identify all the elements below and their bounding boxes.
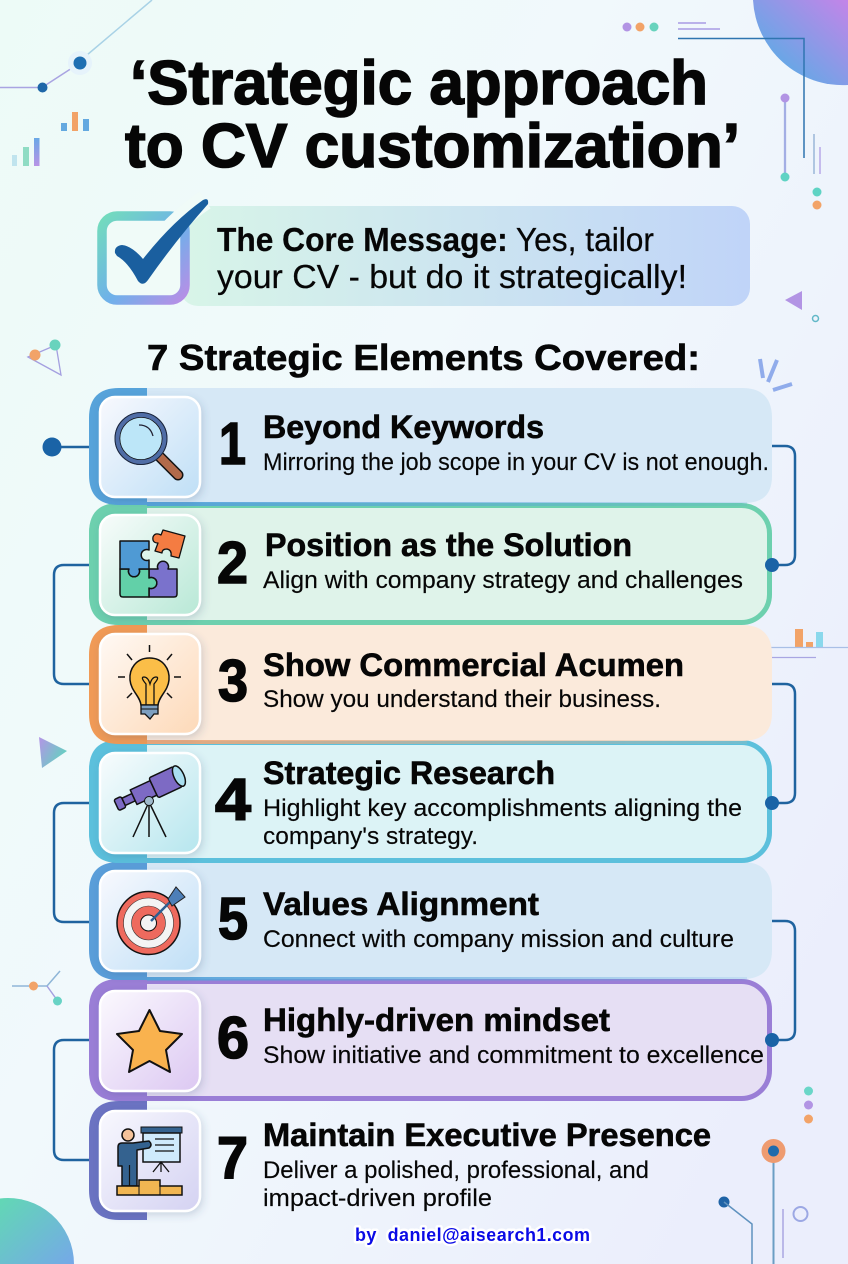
connector dot bbox=[765, 1033, 779, 1047]
row 1 text: Mirroring the job scope in your CV is not enough. bbox=[263, 449, 769, 476]
connector dot bbox=[765, 558, 779, 572]
row 3 text: Show you understand their business. bbox=[263, 686, 661, 713]
panel: row 2 bbox=[89, 503, 779, 625]
row 1 text: Beyond Keywords bbox=[263, 409, 544, 445]
number 5: 5 bbox=[218, 886, 248, 952]
connectors bbox=[52, 446, 795, 1160]
decoration: triangle at left bbox=[39, 737, 67, 768]
row 4 text: Highlight key accomplishments aligning the bbox=[263, 795, 742, 822]
title: to CV customization’ bbox=[125, 112, 740, 181]
core message text: The Core Message: Yes, tailor bbox=[217, 221, 654, 258]
decoration: small bar charts bbox=[12, 112, 89, 166]
row 2 text: Align with company strategy and challenges bbox=[263, 567, 743, 594]
icon tile: puzzle bbox=[100, 515, 200, 615]
row 4 text bbox=[263, 755, 742, 850]
core message text: your CV - but do it strategically! bbox=[217, 258, 687, 295]
row 5 text: Connect with company mission and culture bbox=[263, 926, 734, 953]
row 6 text bbox=[263, 1002, 764, 1069]
panel: row 7 bbox=[89, 1101, 711, 1220]
row 5 text: Values Alignment bbox=[263, 886, 539, 922]
title bbox=[125, 49, 740, 181]
panel: row 6 bbox=[89, 979, 779, 1101]
icon tile: magnifying glass bbox=[100, 397, 200, 497]
decoration: left branch bbox=[12, 971, 62, 1006]
panel: row 5 bbox=[89, 862, 772, 980]
row 6 text: Highly-driven mindset bbox=[263, 1002, 610, 1038]
row 6 text: Show initiative and commitment to excellence bbox=[263, 1042, 764, 1069]
decoration: chart near row 3 bbox=[741, 629, 848, 658]
panel: core message bbox=[102, 199, 750, 306]
row 7 text: Maintain Executive Presence bbox=[263, 1117, 711, 1153]
core message text bbox=[217, 221, 687, 295]
row 4 text: Strategic Research bbox=[263, 755, 555, 791]
number 3: 3 bbox=[218, 648, 248, 714]
row 5 text bbox=[263, 886, 734, 953]
decoration: bottom left blob bbox=[0, 1198, 74, 1264]
row 3 text: Show Commercial Acumen bbox=[263, 647, 684, 683]
panel: row 4 bbox=[89, 740, 779, 863]
number 1: 1 bbox=[219, 411, 246, 477]
number 4: 4 bbox=[215, 767, 251, 833]
decoration: bottom right bbox=[718, 1086, 813, 1264]
row 1 text bbox=[263, 409, 769, 476]
row 4 text: company's strategy. bbox=[263, 823, 478, 850]
icon: checkbox with tick bbox=[102, 199, 208, 300]
row 7 text bbox=[263, 1117, 711, 1212]
decoration: top right dots and lines bbox=[622, 22, 822, 322]
icon tile: target bbox=[100, 871, 200, 971]
decoration: left triangle network bbox=[28, 340, 61, 375]
row 2 text: Position as the Solution bbox=[265, 527, 632, 563]
icon tile: light bulb bbox=[100, 634, 200, 734]
icon tile: star bbox=[100, 991, 200, 1091]
icon tile: telescope bbox=[100, 753, 200, 853]
icon tile: presenter bbox=[100, 1111, 200, 1211]
number 2: 2 bbox=[217, 530, 248, 596]
decoration: top right blob bbox=[753, 0, 848, 85]
connector dot bbox=[765, 796, 779, 810]
decoration: top left network bbox=[0, 0, 152, 92]
panel: row 3 bbox=[89, 625, 772, 744]
panel: row 1 bbox=[89, 388, 772, 506]
decoration: right sparkle bbox=[760, 359, 792, 390]
row 2 text bbox=[263, 527, 743, 594]
heading: elements covered: 7 Strategic Elements Covered: bbox=[147, 337, 700, 378]
footer credit: by daniel@aisearch1.com bbox=[355, 1225, 590, 1245]
row 7 text: impact-driven profile bbox=[263, 1185, 492, 1212]
number 7: 7 bbox=[217, 1125, 248, 1191]
title: ‘Strategic approach bbox=[130, 49, 708, 118]
row 3 text bbox=[263, 647, 684, 713]
row 7 text: Deliver a polished, professional, and bbox=[263, 1157, 649, 1184]
number 6: 6 bbox=[217, 1005, 249, 1071]
connector start dot bbox=[42, 438, 62, 456]
